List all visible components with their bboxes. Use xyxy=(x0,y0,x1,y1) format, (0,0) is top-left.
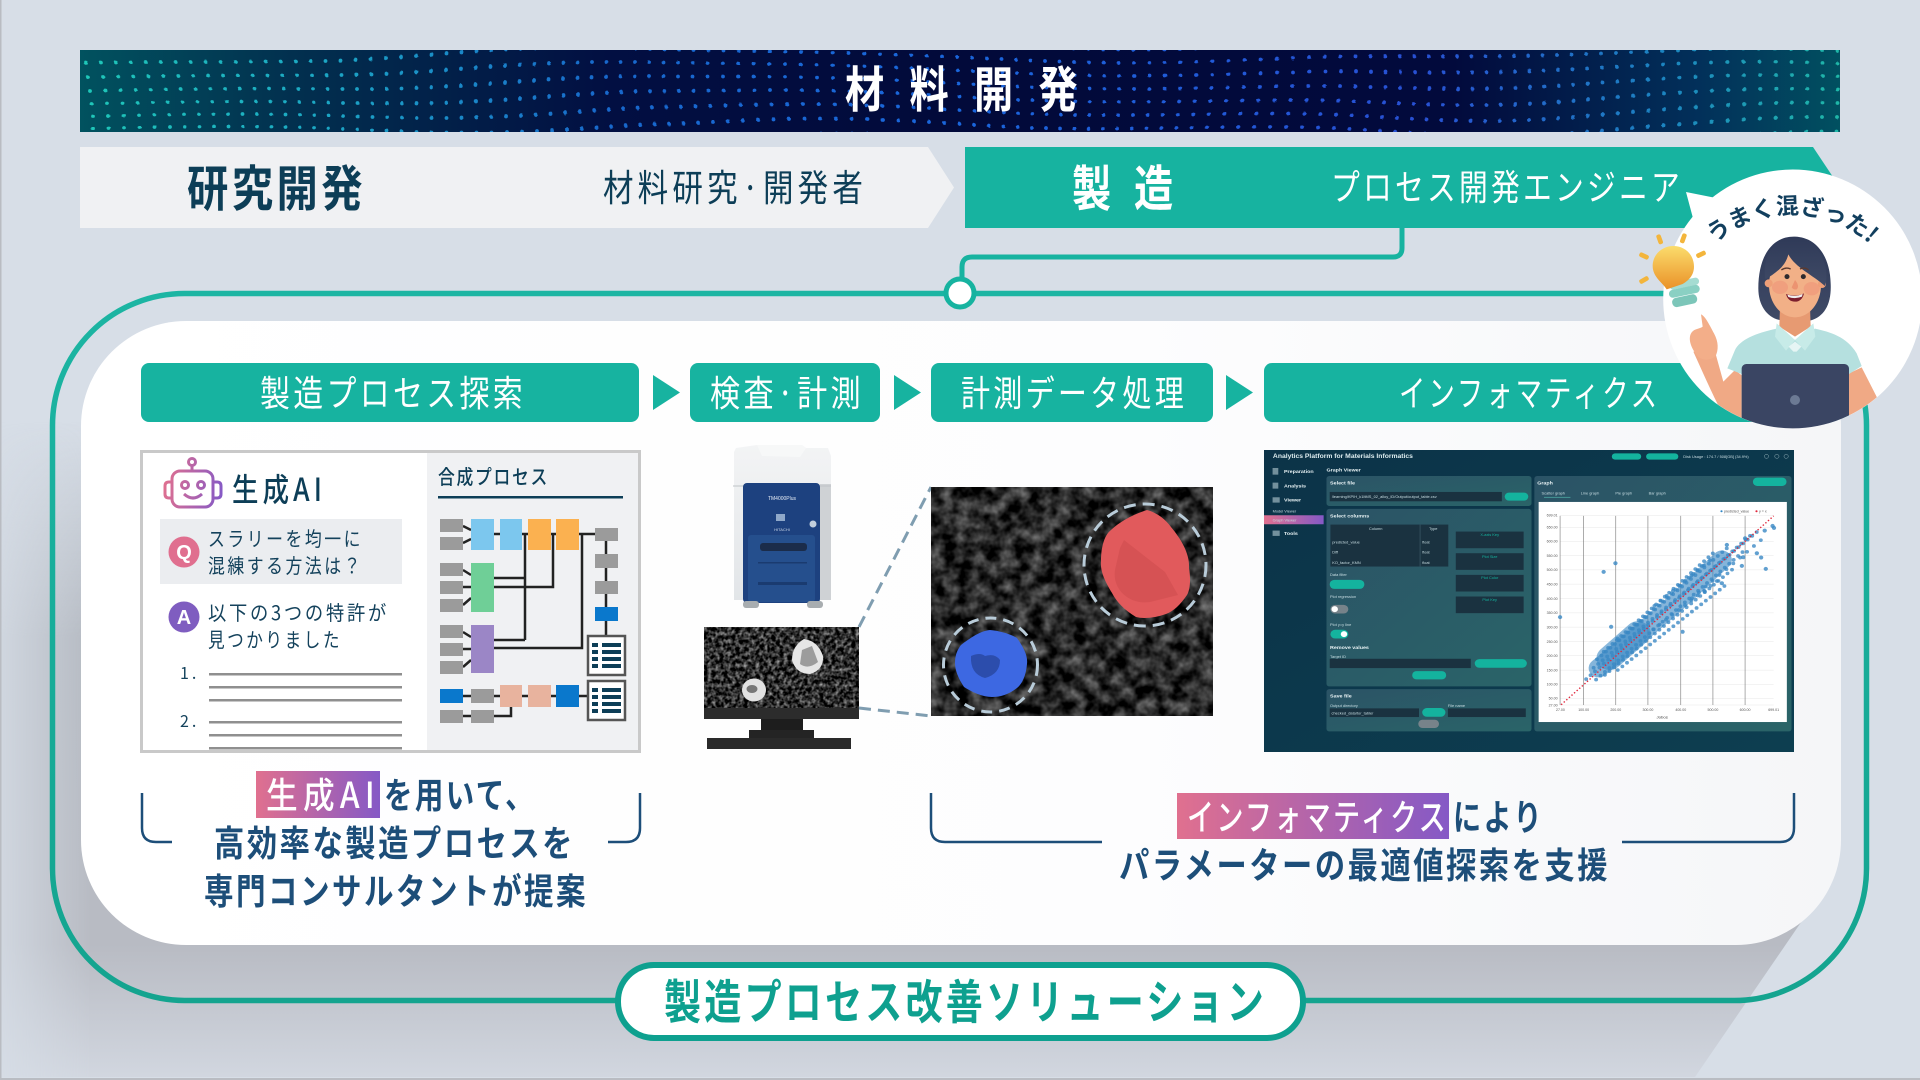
arrow 3 xyxy=(1226,375,1253,410)
main white panel xyxy=(81,321,1841,945)
caption: generative AI: を用いて、 xyxy=(384,767,536,819)
particle large xyxy=(792,639,823,674)
app screenshot: materials informatics platform: Plot Size xyxy=(1482,555,1497,559)
app screenshot: materials informatics platform: Preparation xyxy=(1284,469,1314,475)
chart: scatter plot: 699.01 xyxy=(1547,514,1558,518)
heading: 合成プロセス: 合成プロセス xyxy=(438,461,549,490)
chart: scatter plot: 450.00 xyxy=(1547,583,1558,586)
illustration: segmented SEM particles xyxy=(931,487,1213,716)
chart: scatter plot: 350.00 xyxy=(1547,611,1558,615)
chart: scatter plot: 600.00 xyxy=(1740,708,1751,712)
app screenshot: materials informatics platform: Analysis xyxy=(1284,483,1306,489)
role: プロセス開発エンジニア: プロセス開発エンジニア xyxy=(1331,159,1683,211)
caption: informatics: パラメーターの最適値探索を支援 xyxy=(1119,837,1610,889)
answer list xyxy=(180,660,402,750)
chart: scatter plot: 27.00 xyxy=(1549,703,1558,707)
chart: scatter plot: 50.00 xyxy=(1549,697,1558,701)
app screenshot: materials informatics platform: Type xyxy=(1429,527,1437,531)
page shadow under main panel xyxy=(0,420,1830,1077)
caption: generative AI xyxy=(204,767,588,915)
app screenshot: materials informatics platform: KO_factor_KMN xyxy=(1332,561,1361,565)
app screenshot: materials informatics platform: Plot Key xyxy=(1482,598,1497,602)
face xyxy=(1769,253,1821,317)
app screenshot: materials informatics platform: Model Viewer xyxy=(1273,509,1297,513)
hair fringe xyxy=(1770,252,1826,286)
app screenshot: materials informatics platform: predicted_value xyxy=(1332,541,1360,545)
app screenshot: materials informatics platform: Data filter xyxy=(1330,573,1348,577)
app screenshot: materials informatics platform: File name xyxy=(1448,704,1465,708)
role: 材料研究・開発者: 材料研究·開発者 xyxy=(603,158,867,212)
app screenshot: materials informatics platform: float xyxy=(1422,551,1431,555)
question block xyxy=(160,519,402,584)
caption: generative AI: 専門コンサルタントが提案 xyxy=(204,863,588,915)
icon: table 1 xyxy=(588,636,625,675)
answer block: 以下の3つの特許が xyxy=(208,597,389,626)
nose and mouth xyxy=(1792,280,1798,289)
illustration: electron microscope xyxy=(733,445,831,608)
app screenshot: materials informatics platform: float xyxy=(1422,561,1431,565)
app screenshot: materials informatics platform: Graph Viewer xyxy=(1273,519,1297,523)
particle: blue xyxy=(955,630,1027,697)
icon: table 2 xyxy=(588,681,625,720)
chart: scatter plot: 500.00 xyxy=(1707,708,1718,712)
heading: 研究開発: 研究開発 xyxy=(187,150,366,221)
chart: scatter plot: 200.00 xyxy=(1610,708,1621,712)
app screenshot: materials informatics platform: float xyxy=(1422,541,1431,545)
caption: informatics xyxy=(1119,789,1610,889)
process flow diagram xyxy=(440,519,625,723)
step header: 製造プロセス探索: 製造プロセス探索 xyxy=(260,365,526,417)
answer block xyxy=(168,597,389,653)
app screenshot: materials informatics platform: Bar graph xyxy=(1649,492,1666,496)
chart: scatter plot: predicted_value xyxy=(1724,510,1749,514)
app screenshot: materials informatics platform: Select file xyxy=(1330,481,1355,487)
bracket: right caption xyxy=(931,793,1794,842)
laptop xyxy=(1742,364,1849,428)
label: 生成AI: 生成AI xyxy=(232,465,326,511)
caption: generative AI: 高効率な製造プロセスを xyxy=(214,815,575,867)
answer block: 見つかりました xyxy=(208,624,342,653)
app screenshot: materials informatics platform: Viewer xyxy=(1284,498,1301,504)
step header: 計測データ処理: 計測データ処理 xyxy=(961,365,1187,417)
chart: scatter plot: 27.00 xyxy=(1556,708,1565,712)
app screenshot: materials informatics platform: Tools xyxy=(1284,531,1298,537)
arrow 1 xyxy=(653,375,680,410)
chart: scatter plot: 100.00 xyxy=(1578,708,1589,712)
panel: generative AI and synthesis process xyxy=(142,452,640,752)
app screenshot: materials informatics platform: Analytics Platform for Materials Informatics xyxy=(1273,453,1413,460)
ribbon: 製造 xyxy=(965,147,1840,228)
dashed ring: red xyxy=(1084,504,1206,626)
bracket: left caption xyxy=(142,793,640,842)
app screenshot: materials informatics platform: Remove values xyxy=(1330,645,1369,651)
chart: scatter plot: 150.00 xyxy=(1547,669,1558,672)
app screenshot: materials informatics platform: Save file xyxy=(1330,694,1352,700)
app screenshot: materials informatics platform: Scatter graph xyxy=(1542,492,1565,496)
app screenshot: materials informatics platform: Line graph xyxy=(1581,492,1599,496)
eyes and brows xyxy=(1784,274,1790,279)
app screenshot: materials informatics platform: Output directory xyxy=(1330,704,1358,708)
app screenshot: materials informatics platform: X-axis Key xyxy=(1480,533,1499,537)
bubble text: うまく混ざった! xyxy=(1708,194,1879,242)
app screenshot: materials informatics platform: Select columns xyxy=(1330,513,1369,519)
answer list: 1. xyxy=(180,660,199,684)
solution name pill: 製造プロセス改善ソリューション xyxy=(664,964,1267,1033)
chart: scatter plot: 250.00 xyxy=(1547,640,1558,644)
chart: scatter plot: 550.00 xyxy=(1547,554,1558,558)
header banner: 材料開発 xyxy=(80,50,1840,132)
step header: インフォマティクス: インフォマティクス xyxy=(1399,365,1660,417)
app screenshot: materials informatics platform: Plot y=y line xyxy=(1330,623,1351,627)
app screenshot: materials informatics platform: Pie graph xyxy=(1615,492,1632,496)
app screenshot: materials informatics platform: Target ID xyxy=(1330,655,1346,659)
app screenshot: materials informatics platform: Plot regression xyxy=(1330,595,1356,599)
app screenshot: materials informatics platform: Diff xyxy=(1332,551,1339,555)
caption: generative AI: 生成AI xyxy=(266,767,380,819)
shirt xyxy=(1727,329,1862,423)
app screenshot: materials informatics platform: Disk Usage : 174.7 / 508[GB] (34.9%) xyxy=(1683,455,1749,459)
question block: Q xyxy=(176,542,192,564)
step header: 製造プロセス探索 xyxy=(141,363,639,422)
chart: scatter plot: 699.01 xyxy=(1768,708,1779,712)
app screenshot: materials informatics platform: Column xyxy=(1369,527,1382,531)
icon: light bulb xyxy=(1638,233,1707,308)
app screenshot: materials informatics platform xyxy=(1264,450,1794,752)
app screenshot: materials informatics platform: checked_data/tor_table/ xyxy=(1331,711,1374,715)
arrow 2 xyxy=(894,375,921,410)
question block: 混練する方法は？ xyxy=(208,550,363,579)
step header: 検査・計測: 検査·計測 xyxy=(710,365,864,417)
arm left and hand xyxy=(1693,352,1743,423)
arm right xyxy=(1849,367,1877,416)
app screenshot: materials informatics platform: Plot Color xyxy=(1481,576,1499,580)
icon: robot xyxy=(165,458,221,507)
chart: scatter plot xyxy=(1539,502,1787,722)
chart: scatter plot: 200.00 xyxy=(1547,654,1558,658)
app screenshot: materials informatics platform: Graph xyxy=(1537,481,1553,487)
app screenshot: materials informatics platform: /learning/KPIH_k1ItMS_02_alloy_ID/Output/output_table.csv xyxy=(1332,495,1437,499)
connector node xyxy=(946,279,974,307)
chart: scatter plot: 100.00 xyxy=(1547,683,1558,687)
caption: informatics: により xyxy=(1453,789,1544,841)
dashed ring: blue xyxy=(944,618,1038,712)
particle: red xyxy=(1101,510,1190,618)
chart: scatter plot: 650.00 xyxy=(1547,526,1558,530)
chart: scatter plot: 300.00 xyxy=(1547,626,1558,629)
ribbon: 研究開発 xyxy=(80,147,954,228)
caption: informatics: インフォマティクス xyxy=(1187,789,1448,841)
step header: インフォマティクス xyxy=(1264,363,1794,422)
illustration: monitor with SEM image xyxy=(704,627,859,749)
zoom guide lines xyxy=(859,487,931,716)
chart: scatter plot: 400.00 xyxy=(1675,708,1686,712)
chart: scatter plot: y = x xyxy=(1759,510,1767,514)
heading: 製造: 製造 xyxy=(1072,150,1196,220)
chart: scatter plot: 300.00 xyxy=(1642,708,1653,712)
connector from 製造 to solution frame xyxy=(946,228,1402,307)
neck xyxy=(1779,311,1811,336)
title: 材料開発 xyxy=(845,51,1103,121)
chart: scatter plot: 500.00 xyxy=(1547,568,1558,572)
chart: scatter plot: Jobos xyxy=(1657,715,1668,720)
answer list: 2. xyxy=(180,708,199,732)
illustration: person with laptop and light bulb xyxy=(1639,233,1877,428)
app screenshot: materials informatics platform: Graph Viewer xyxy=(1326,468,1361,474)
question block: スラリーを均一に xyxy=(208,523,363,552)
particle small xyxy=(742,678,766,702)
illustration: electron microscope: HITACHI xyxy=(774,527,790,532)
chart: scatter plot: 400.00 xyxy=(1547,597,1558,601)
chart: scatter plot: 600.00 xyxy=(1547,540,1558,544)
outer solution frame xyxy=(52,294,1866,1000)
speech bubble xyxy=(1663,170,1920,422)
answer block: A xyxy=(177,607,191,629)
illustration: electron microscope: TM4000Plus xyxy=(768,496,797,502)
hair back xyxy=(1758,237,1831,321)
